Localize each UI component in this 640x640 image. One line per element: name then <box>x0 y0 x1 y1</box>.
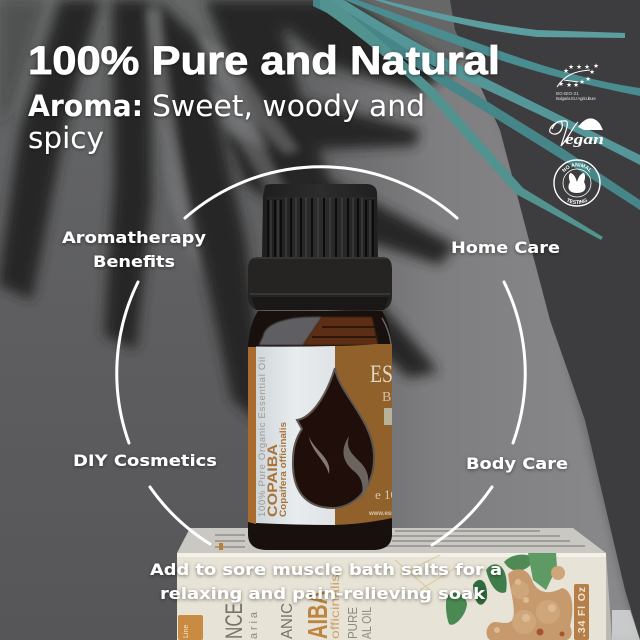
icon: EU organic leaf badge: ★ <box>576 63 582 71</box>
cap ribbed top <box>262 184 378 258</box>
drop emblem <box>293 368 374 508</box>
label: body care: Body Care <box>466 454 568 473</box>
box front printed text: AIBA <box>302 590 333 639</box>
box front printed text <box>178 574 374 640</box>
subtitle: aroma description: Aroma: <box>28 89 143 123</box>
icon: EU organic leaf badge: ★ <box>573 81 579 89</box>
icon: EU organic leaf badge: ★ <box>585 75 591 83</box>
bottle label <box>248 342 404 525</box>
icon: vegan logo: egan <box>565 132 604 148</box>
box front printed text: Line <box>183 625 190 638</box>
caption: bottom usage tip <box>150 560 502 603</box>
icon: no animal testing badge <box>553 159 601 207</box>
title: 100% Pure and Natural <box>28 39 500 83</box>
label: aromatherapy benefits <box>62 228 207 271</box>
label text: Bu <box>382 390 398 405</box>
icon: EU organic leaf badge: BG-BIO-21 <box>556 91 579 96</box>
box front printed text: aria <box>248 611 260 639</box>
icon: EU organic leaf badge: ★ <box>579 78 585 86</box>
label text <box>257 357 404 517</box>
bottle <box>248 184 404 550</box>
icon: no animal testing badge: TESTING <box>567 198 588 204</box>
icon: EU organic leaf badge <box>556 62 599 101</box>
caption: bottom usage tip: Add to sore muscle bath salts for a <box>150 560 502 579</box>
box front printed text: NCE <box>221 603 248 639</box>
cap collar <box>248 257 392 310</box>
icon: EU organic leaf badge: Bulgaria EU Agriculture <box>556 96 597 101</box>
box top face with printed text <box>177 528 606 553</box>
label: home care: Home Care <box>451 238 560 257</box>
icon: EU organic leaf badge: ★ <box>563 67 569 75</box>
icon: vegan logo <box>550 118 604 148</box>
label: aromatherapy benefits: Aromatherapy <box>62 228 207 247</box>
icon: EU organic leaf badge: ★ <box>589 68 595 76</box>
label: DIY cosmetics: DIY Cosmetics <box>73 451 217 470</box>
box front face <box>177 553 606 640</box>
product box <box>177 528 640 640</box>
palm leaves: teal fronds top right <box>313 0 640 240</box>
label: aromatherapy benefits: Benefits <box>93 252 175 271</box>
caption: bottom usage tip: relaxing and pain-relieving soak <box>160 584 485 603</box>
label text: e 10 <box>375 487 397 502</box>
label text: ESS <box>370 361 404 388</box>
circular ring: white arc segments <box>117 167 525 545</box>
volume badge: .34 Fl Oz <box>576 587 588 637</box>
box front printed text: officinalis <box>328 574 342 639</box>
icon: EU organic leaf badge: ★ <box>593 62 599 70</box>
label text: Copaifera officinalis <box>278 422 289 517</box>
icon: EU organic leaf badge: ★ <box>584 63 590 71</box>
amber glass body <box>248 311 392 550</box>
icon: EU organic leaf badge: ★ <box>566 81 572 89</box>
icon: no animal testing badge: NO ANIMAL <box>562 162 591 172</box>
subtitle: aroma description <box>28 89 425 155</box>
label text: COPAIBA <box>264 444 280 517</box>
box front printed text: ANIC <box>279 603 296 639</box>
subtitle: aroma description: spicy <box>28 121 104 155</box>
label text: www.ess <box>368 511 395 517</box>
icon: EU organic leaf badge: ★ <box>558 80 564 88</box>
floral illustration <box>395 553 572 640</box>
box front printed text: PURE <box>345 607 360 639</box>
icon: EU organic leaf badge: ★ <box>568 63 574 71</box>
label text: 100% Pure Organic Essential Oil <box>257 357 268 517</box>
box front printed text: AL OIL <box>359 607 374 639</box>
subtitle: aroma description: Sweet, woody and <box>152 89 425 123</box>
